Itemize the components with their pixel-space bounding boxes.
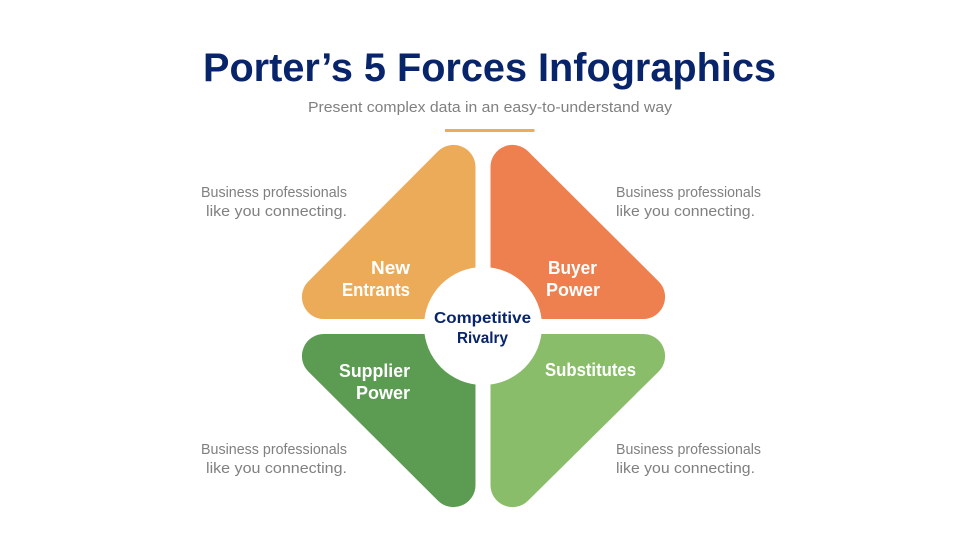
text block: top right: like you connecting.: [616, 204, 755, 220]
text block: bottom left: Business professionals: [201, 442, 347, 458]
shape: supplier power: [302, 334, 476, 507]
label: supplier power: Supplier: [339, 361, 410, 381]
panel: buyer power: [490, 145, 665, 319]
center: competitive rivalry: [424, 267, 542, 385]
panel: new entrants: [302, 145, 476, 319]
label: supplier power: Power: [356, 383, 410, 403]
text block: bottom left: like you connecting.: [206, 461, 347, 477]
label: new entrants: Entrants: [342, 280, 410, 300]
label: new entrants: New: [371, 258, 411, 278]
subtitle: Present complex data in an easy-to-understand way: [308, 99, 673, 116]
text block: top right: Business professionals: [616, 185, 761, 201]
shape: new entrants: [302, 145, 476, 319]
center label: Competitive: [434, 310, 531, 327]
shape: buyer power: [490, 145, 665, 319]
text block: bottom right: like you connecting.: [616, 461, 755, 477]
label: substitutes: Substitutes: [545, 360, 636, 380]
center label: Rivalry: [457, 330, 508, 347]
label: buyer power: Buyer: [548, 258, 597, 278]
center circle: [424, 267, 542, 385]
label: buyer power: Power: [546, 280, 600, 300]
text block: top left: like you connecting.: [206, 204, 347, 220]
panel: substitutes: [490, 334, 665, 507]
title: Porter’s 5 Forces Infographics: [203, 46, 776, 90]
text block: bottom right: Business professionals: [616, 442, 761, 458]
accent underline: [445, 129, 534, 132]
text block: top left: Business professionals: [201, 185, 347, 201]
shape: substitutes: [490, 334, 665, 507]
panel: supplier power: [302, 334, 476, 507]
